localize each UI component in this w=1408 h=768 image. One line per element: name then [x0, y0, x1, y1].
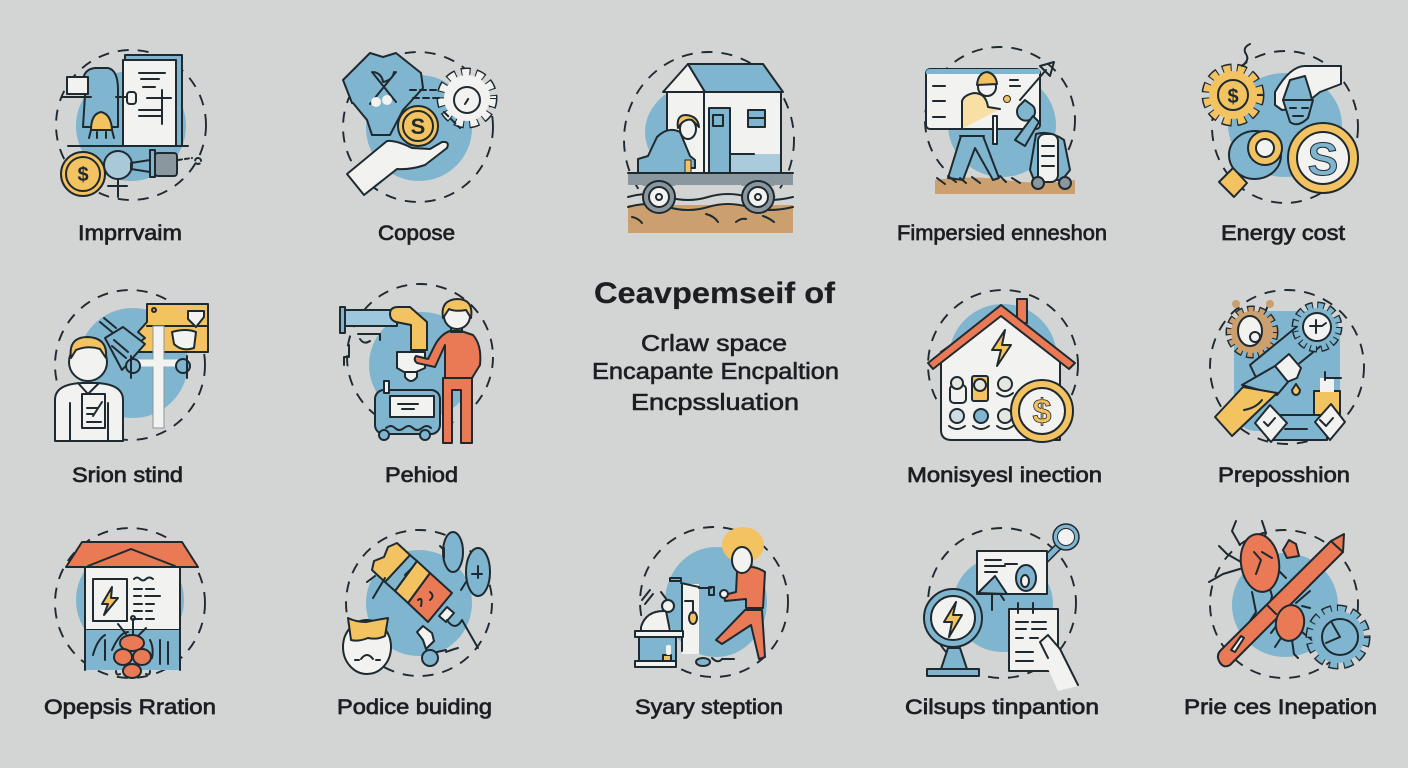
icon: big dollar coin — [1288, 123, 1358, 193]
panel: Copose — [343, 52, 493, 202]
icon: machine — [635, 578, 714, 667]
ground — [628, 205, 793, 233]
dashed ring — [925, 47, 1075, 193]
label: Syary steption: Syary steption — [635, 696, 783, 719]
dashed ring — [55, 290, 205, 440]
icon: bulb tool — [417, 626, 458, 666]
label: Fimpersied enneshon: Fimpersied enneshon — [897, 222, 1107, 245]
meter dials — [949, 376, 1013, 429]
blue backdrop — [78, 308, 188, 418]
label: Monisyesl inection: Monisyesl inection — [907, 464, 1102, 487]
icon: blue gear — [1311, 610, 1365, 664]
icon: worker with shovel — [948, 72, 1000, 180]
icon: lightning mirror — [924, 589, 982, 676]
label: Cilsups tinpantion: Cilsups tinpantion — [905, 696, 1099, 719]
label: Imprrvaim: Imprrvaim — [78, 222, 182, 245]
dashed ring — [343, 52, 493, 202]
dashed ring — [56, 50, 206, 200]
blue backdrop — [1232, 553, 1338, 657]
label: Energy cost: Energy cost — [1221, 222, 1345, 245]
blue backdrop — [366, 550, 472, 656]
icon: yellow gear: $ — [1227, 86, 1239, 108]
panel: Srion stind — [55, 290, 208, 441]
label: Prie ces Inepation: Prie ces Inepation — [1184, 696, 1377, 719]
panel: Cilsups tinpantion — [924, 524, 1079, 691]
blue backdrop — [76, 546, 184, 654]
dashed ring — [1212, 51, 1358, 203]
icon: pump machine — [375, 381, 440, 440]
icon: dollar coin — [1011, 380, 1073, 442]
icon: open hand — [347, 141, 448, 195]
icon: motor and gauge — [104, 150, 201, 197]
icon: yellow glove — [1215, 354, 1301, 436]
dashed ring — [55, 528, 205, 678]
icon: sack — [343, 618, 391, 674]
icon: sink basin — [397, 352, 425, 381]
icon: orange pencil — [1218, 534, 1344, 666]
icon: small beetle — [1271, 591, 1312, 658]
dashed ring — [640, 527, 788, 677]
icon: large beetle — [1209, 521, 1299, 624]
icon: blue shield shape — [343, 53, 423, 135]
panel: Preposshion — [1210, 290, 1364, 444]
label: Preposshion: Preposshion — [1218, 464, 1350, 487]
floor puck — [696, 658, 734, 666]
label: Srion stind: Srion stind — [72, 464, 183, 487]
dashed ring — [1210, 290, 1364, 444]
icon: building — [66, 542, 198, 670]
blue backdrop — [369, 312, 475, 418]
panel: Opepsis Rration — [55, 528, 205, 678]
icon: hanging blue bulb — [1017, 100, 1035, 121]
icon: house — [663, 64, 783, 173]
icon: gear with dial — [410, 73, 492, 128]
ground — [935, 178, 1075, 194]
panel: Podice buiding — [343, 530, 492, 676]
icon: blue pipe — [340, 307, 397, 365]
center title — [592, 277, 839, 415]
icon: notepad with hand — [1009, 603, 1078, 691]
icon: yellow sign — [127, 304, 208, 352]
heading: Ceavpemseif of — [594, 277, 836, 310]
icon: person in orange — [415, 299, 480, 443]
icon: blue gear with dial — [1296, 306, 1338, 348]
blue backdrop — [953, 556, 1053, 652]
dashed ring — [928, 528, 1076, 678]
icon: yellow elbow — [390, 307, 427, 350]
panel: Monisyesl inection — [928, 290, 1078, 442]
icon: dollar coin — [398, 106, 438, 146]
icon: document — [123, 55, 182, 146]
subtitle line 3: Encpssluation — [631, 389, 799, 415]
icon: tool body — [1250, 320, 1322, 390]
icon: crouching worker — [638, 115, 699, 177]
dashed ring — [347, 284, 493, 430]
label: Copose: Copose — [378, 222, 455, 245]
subtitle line 2: Encapante Encpaltion — [592, 358, 839, 384]
dashed ring — [1210, 530, 1358, 678]
icon: person in orange — [716, 527, 765, 659]
icon: discs — [440, 532, 490, 596]
icon: document with chart — [977, 551, 1047, 610]
panel: Fimpersied enneshon — [925, 47, 1075, 194]
icon: tilted paper — [100, 318, 145, 370]
label: Pehiod: Pehiod — [385, 464, 458, 487]
blue backdrop — [1228, 73, 1342, 177]
panel: Imprrvaim — [56, 50, 206, 200]
icon: dollar coin: $ — [1033, 393, 1052, 431]
icon: soap bottle — [1314, 372, 1341, 417]
dashed ring — [346, 530, 492, 676]
subtitle line 1: Crlaw space — [641, 330, 787, 356]
icon: trailer with wheels — [628, 173, 793, 223]
icon: tan gear — [1230, 300, 1274, 354]
shelf line — [68, 145, 188, 147]
label: Opepsis Rration: Opepsis Rration — [44, 696, 216, 719]
icon: red bug — [114, 616, 151, 678]
icon: post with valves — [126, 326, 190, 428]
icon: base with diamonds — [1255, 404, 1345, 442]
panel: Pehiod — [340, 284, 493, 443]
icon: info board — [926, 62, 1054, 129]
blue backdrop — [645, 82, 765, 182]
panel: Syary steption — [635, 527, 788, 677]
icon: dollar coin: $ — [77, 164, 89, 186]
icon: yellow diamond tag — [1219, 168, 1247, 197]
blue backdrop — [366, 75, 472, 181]
blue backdrop — [948, 73, 1056, 177]
dashed ring — [624, 52, 794, 228]
dashed ring — [928, 290, 1078, 440]
blue backdrop — [1234, 311, 1340, 431]
label: Podice buiding: Podice buiding — [337, 696, 492, 719]
icon: big dollar coin: S — [1308, 133, 1338, 185]
icon: hand with device — [1275, 66, 1341, 124]
blue backdrop — [949, 304, 1057, 412]
icon: magnifier — [1042, 524, 1079, 563]
blue backdrop — [76, 71, 186, 181]
icon: tape roll — [1229, 131, 1282, 179]
icon: house — [928, 299, 1075, 440]
icon: dollar coin — [61, 152, 105, 196]
panel: Prie ces Inepation — [1209, 521, 1365, 678]
icon: paint tube — [367, 543, 478, 648]
icon: blue hood — [62, 68, 136, 138]
soil marks — [937, 176, 1020, 184]
icon: dollar coin: S — [411, 114, 425, 139]
panel: house on trailer — [624, 52, 794, 233]
blue backdrop — [665, 547, 767, 657]
icon: person with clipboard — [55, 337, 123, 441]
panel: Energy cost — [1207, 44, 1358, 203]
icon: yellow gear — [1207, 44, 1259, 121]
icon: electrical panel — [93, 578, 160, 621]
icon: pump machine — [1015, 116, 1071, 189]
